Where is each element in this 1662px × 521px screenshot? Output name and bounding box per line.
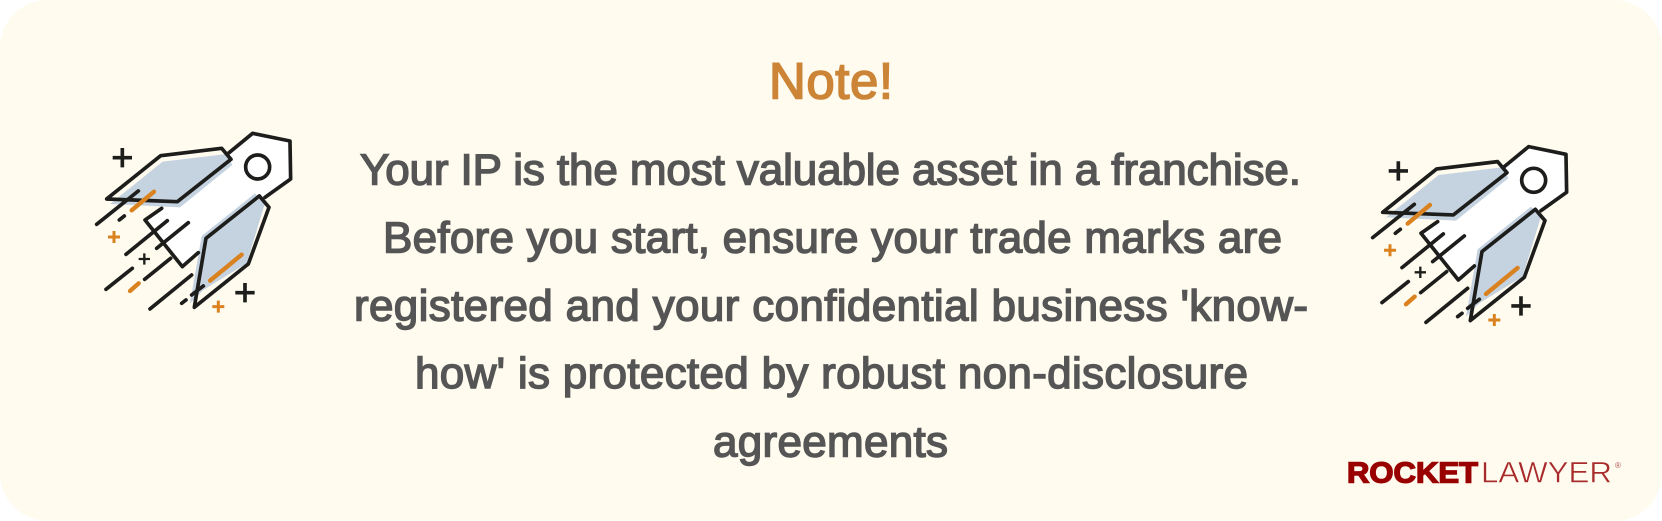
icon: left rocket	[97, 133, 291, 313]
icon: right rocket	[1373, 147, 1567, 326]
text block: note body: registered and your confidential business 'know-	[354, 282, 1308, 331]
heading: Note!: Note!	[769, 52, 893, 109]
text block: note body: Your IP is the most valuable asset in a franchise.	[360, 145, 1301, 194]
logo: Rocket Lawyer	[1347, 456, 1621, 489]
text block: note body	[354, 145, 1308, 467]
logo: Rocket Lawyer: ROCKET	[1347, 457, 1478, 489]
text block: note body: Before you start, ensure your trade marks are	[383, 213, 1282, 262]
text block: note body: agreements	[713, 418, 948, 467]
text block: note body: how' is protected by robust non-disclosure	[415, 349, 1248, 398]
logo: Rocket Lawyer: LAWYER	[1481, 456, 1612, 489]
logo: Rocket Lawyer: ®	[1615, 461, 1621, 470]
